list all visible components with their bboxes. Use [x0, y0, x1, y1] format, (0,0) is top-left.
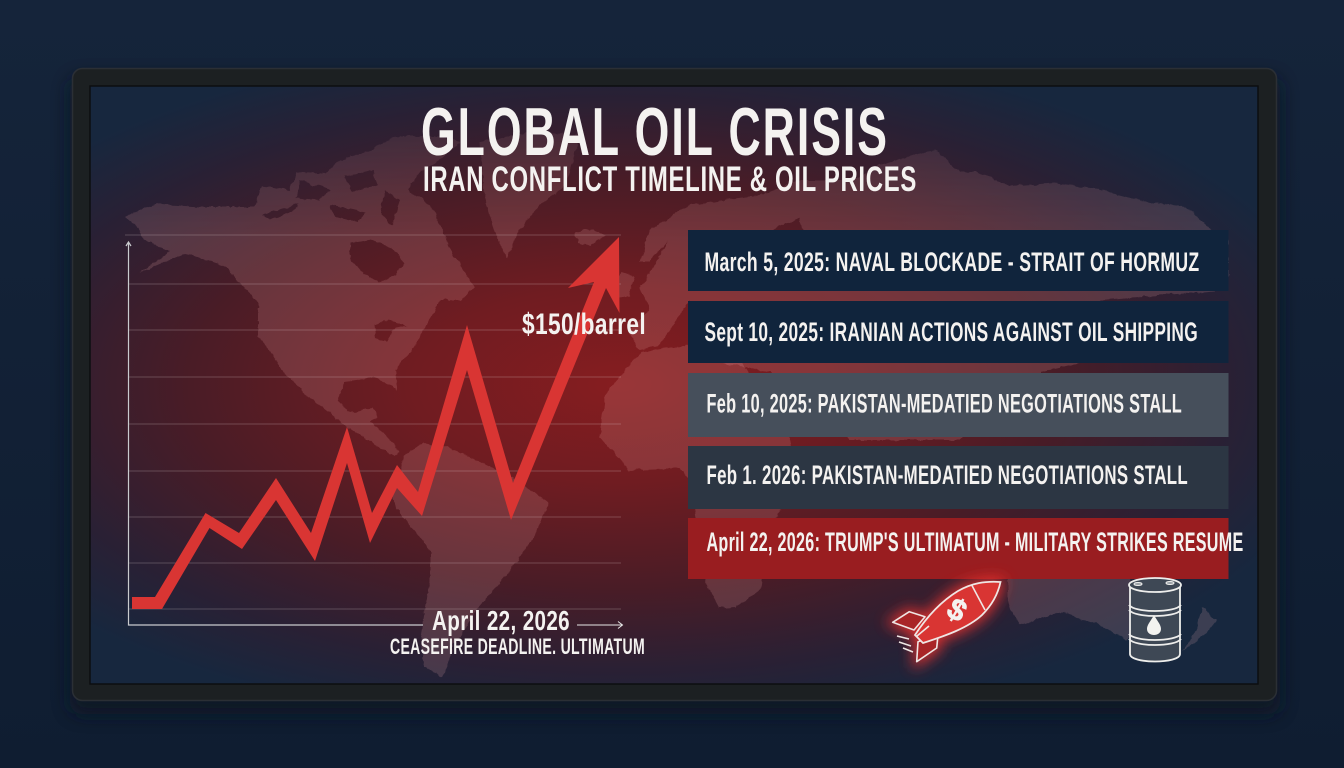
chart: deadline caption: CEASEFIRE DEADLINE. ULTIMATUM: [390, 634, 645, 659]
map: Australia region: [1008, 578, 1142, 640]
map: Iceland: [575, 229, 606, 245]
timeline event: Feb 1, 2026: [688, 446, 1228, 509]
timeline event: April 22, 2026: [688, 518, 1244, 579]
timeline event: March 5, 2025: [688, 230, 1228, 291]
map: British Isles: [619, 272, 635, 298]
panel: monitor frame: [72, 68, 1276, 700]
panel: timeline: [688, 230, 1244, 579]
arrow: timeline direction: [577, 622, 622, 628]
map: Europe and Asia: [628, 150, 1228, 440]
icon: rocket with dollar sign: [893, 582, 1000, 662]
map: Africa: [600, 345, 800, 608]
panel: screen bezel edge: [90, 86, 1258, 684]
icon: rocket with dollar sign: $: [941, 592, 972, 629]
subtitle: IRAN CONFLICT TIMELINE & OIL PRICES: [423, 160, 917, 199]
chart axes: [126, 242, 423, 625]
title: GLOBAL OIL CRISIS: [421, 94, 889, 170]
icon: oil barrel: [1129, 578, 1181, 662]
map: Greenland: [480, 132, 580, 258]
chart: date label: April 22, 2026: [432, 605, 570, 636]
chart: rising price arrow: [132, 237, 620, 609]
timeline event: Feb 10, 2025: [688, 373, 1228, 437]
chart gridlines: [125, 235, 621, 609]
map: North America: [125, 136, 474, 456]
map: South America: [392, 443, 548, 677]
panel: screen background: [90, 86, 1258, 684]
map: New Zealand: [1182, 607, 1217, 652]
world map: [125, 132, 1228, 677]
chart: oil price line chart: [125, 235, 646, 659]
timeline event: Sept 10, 2025: [688, 301, 1228, 363]
callout: price label: $150/barrel: [522, 308, 646, 341]
